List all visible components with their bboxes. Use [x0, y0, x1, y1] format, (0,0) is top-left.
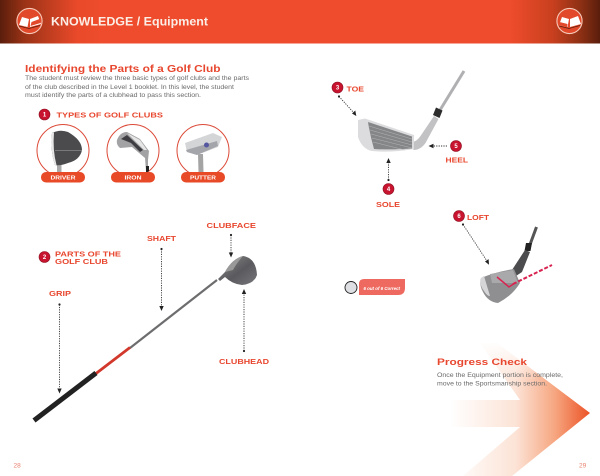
- status pill: [359, 279, 405, 295]
- iron head: [117, 132, 149, 171]
- badge 4: 4: [387, 187, 391, 193]
- page number left: 28: [14, 462, 21, 470]
- club head: [218, 256, 257, 285]
- arrow: heel: [428, 144, 447, 148]
- heading: types of golf clubs: TYPES OF GOLF CLUBS: [56, 110, 163, 120]
- loft angle solid line: [497, 277, 515, 287]
- heading: parts of the golf club: PARTS OF THE: [55, 250, 121, 258]
- arrow: clubhead: [242, 289, 246, 352]
- iron grooves: [368, 122, 412, 149]
- label: iron: [111, 172, 155, 182]
- arrow: toe: [338, 95, 356, 116]
- label: clubhead: CLUBHEAD: [219, 357, 269, 366]
- section heading: Identifying the Parts of a Golf Club: [25, 64, 221, 75]
- label: toe: TOE: [346, 84, 364, 94]
- iron hosel: [412, 116, 438, 150]
- icon: open book right: [557, 8, 582, 34]
- heading: parts of the golf club: [55, 250, 121, 266]
- label: shaft: SHAFT: [147, 234, 177, 243]
- arrow: grip: [57, 303, 62, 394]
- driver hosel: [57, 164, 62, 172]
- page number right: 29: [579, 462, 587, 470]
- label: driver: [41, 172, 85, 182]
- iron head: [358, 118, 414, 152]
- illustration: golf club: [34, 256, 257, 420]
- club grip: [34, 373, 96, 420]
- panel: putter: [177, 124, 229, 176]
- illustration: wedge with loft angle: [480, 227, 552, 303]
- progress paragraph: Once the Equipment portion is complete,: [437, 372, 563, 379]
- iron ferrule: [433, 108, 442, 118]
- illustration: iron: [358, 71, 464, 152]
- label: putter: PUTTER: [190, 176, 217, 182]
- header title: KNOWLEDGE / Equipment: [51, 16, 208, 28]
- label: clubface: CLUBFACE: [206, 221, 256, 230]
- label: iron: IRON: [124, 176, 142, 182]
- driver head: [51, 131, 82, 165]
- wedge shaft: [528, 227, 536, 250]
- badge 5: 5: [454, 144, 458, 150]
- badge 4: [383, 184, 394, 194]
- badge 6: 6: [457, 214, 461, 220]
- badge 2: 2: [43, 255, 47, 261]
- arrow: loft: [462, 223, 489, 265]
- intro paragraph: [25, 75, 250, 99]
- badge 3: [332, 82, 343, 93]
- badge 1: [39, 109, 50, 120]
- label: grip: GRIP: [49, 289, 71, 298]
- progress paragraph: [437, 372, 563, 388]
- badge 3: 3: [336, 86, 340, 92]
- label: sole: SOLE: [376, 200, 400, 209]
- putter shaft: [198, 154, 204, 172]
- icon: open book left: [17, 8, 42, 34]
- loft angle dashed line: [513, 265, 552, 284]
- label: driver: DRIVER: [50, 176, 76, 182]
- intro paragraph: The student must review the three basic types of golf clubs and the parts: [25, 75, 250, 82]
- progress indicator: [345, 279, 405, 295]
- putter head: [185, 133, 222, 155]
- club red shaft section: [96, 348, 130, 374]
- wedge hosel: [512, 250, 530, 276]
- intro paragraph: must identify the parts of a clubhead to pass this section.: [25, 92, 201, 99]
- arrow: progress background: [440, 340, 590, 476]
- header band: [0, 0, 600, 44]
- label: heel: HEEL: [446, 156, 469, 164]
- heading: progress check: Progress Check: [437, 357, 528, 368]
- badge 5: [450, 140, 462, 152]
- arrow: shaft: [159, 248, 164, 311]
- status text: 6 out of 6 Correct: [364, 286, 400, 292]
- wedge head: [480, 269, 520, 303]
- badge 6: [454, 210, 464, 222]
- label: loft: LOFT: [467, 213, 490, 222]
- heading: parts of the golf club: GOLF CLUB: [55, 257, 108, 266]
- arrow: sole: [386, 158, 391, 181]
- status circle: [345, 282, 357, 294]
- panel: iron: [107, 124, 159, 176]
- label: putter: [181, 172, 225, 182]
- wedge ferrule: [524, 243, 532, 251]
- badge 1: 1: [43, 113, 47, 119]
- panel: driver: [37, 124, 89, 176]
- intro paragraph: of the club described in the Level 1 booklet. In this level, the student: [25, 84, 234, 91]
- driver face rim: [51, 132, 56, 165]
- progress paragraph: move to the Sportsmanship section.: [437, 380, 547, 388]
- club shaft: [130, 280, 217, 348]
- badge 2: [39, 252, 50, 262]
- iron shaft: [437, 71, 464, 115]
- arrow: clubface: [229, 234, 233, 258]
